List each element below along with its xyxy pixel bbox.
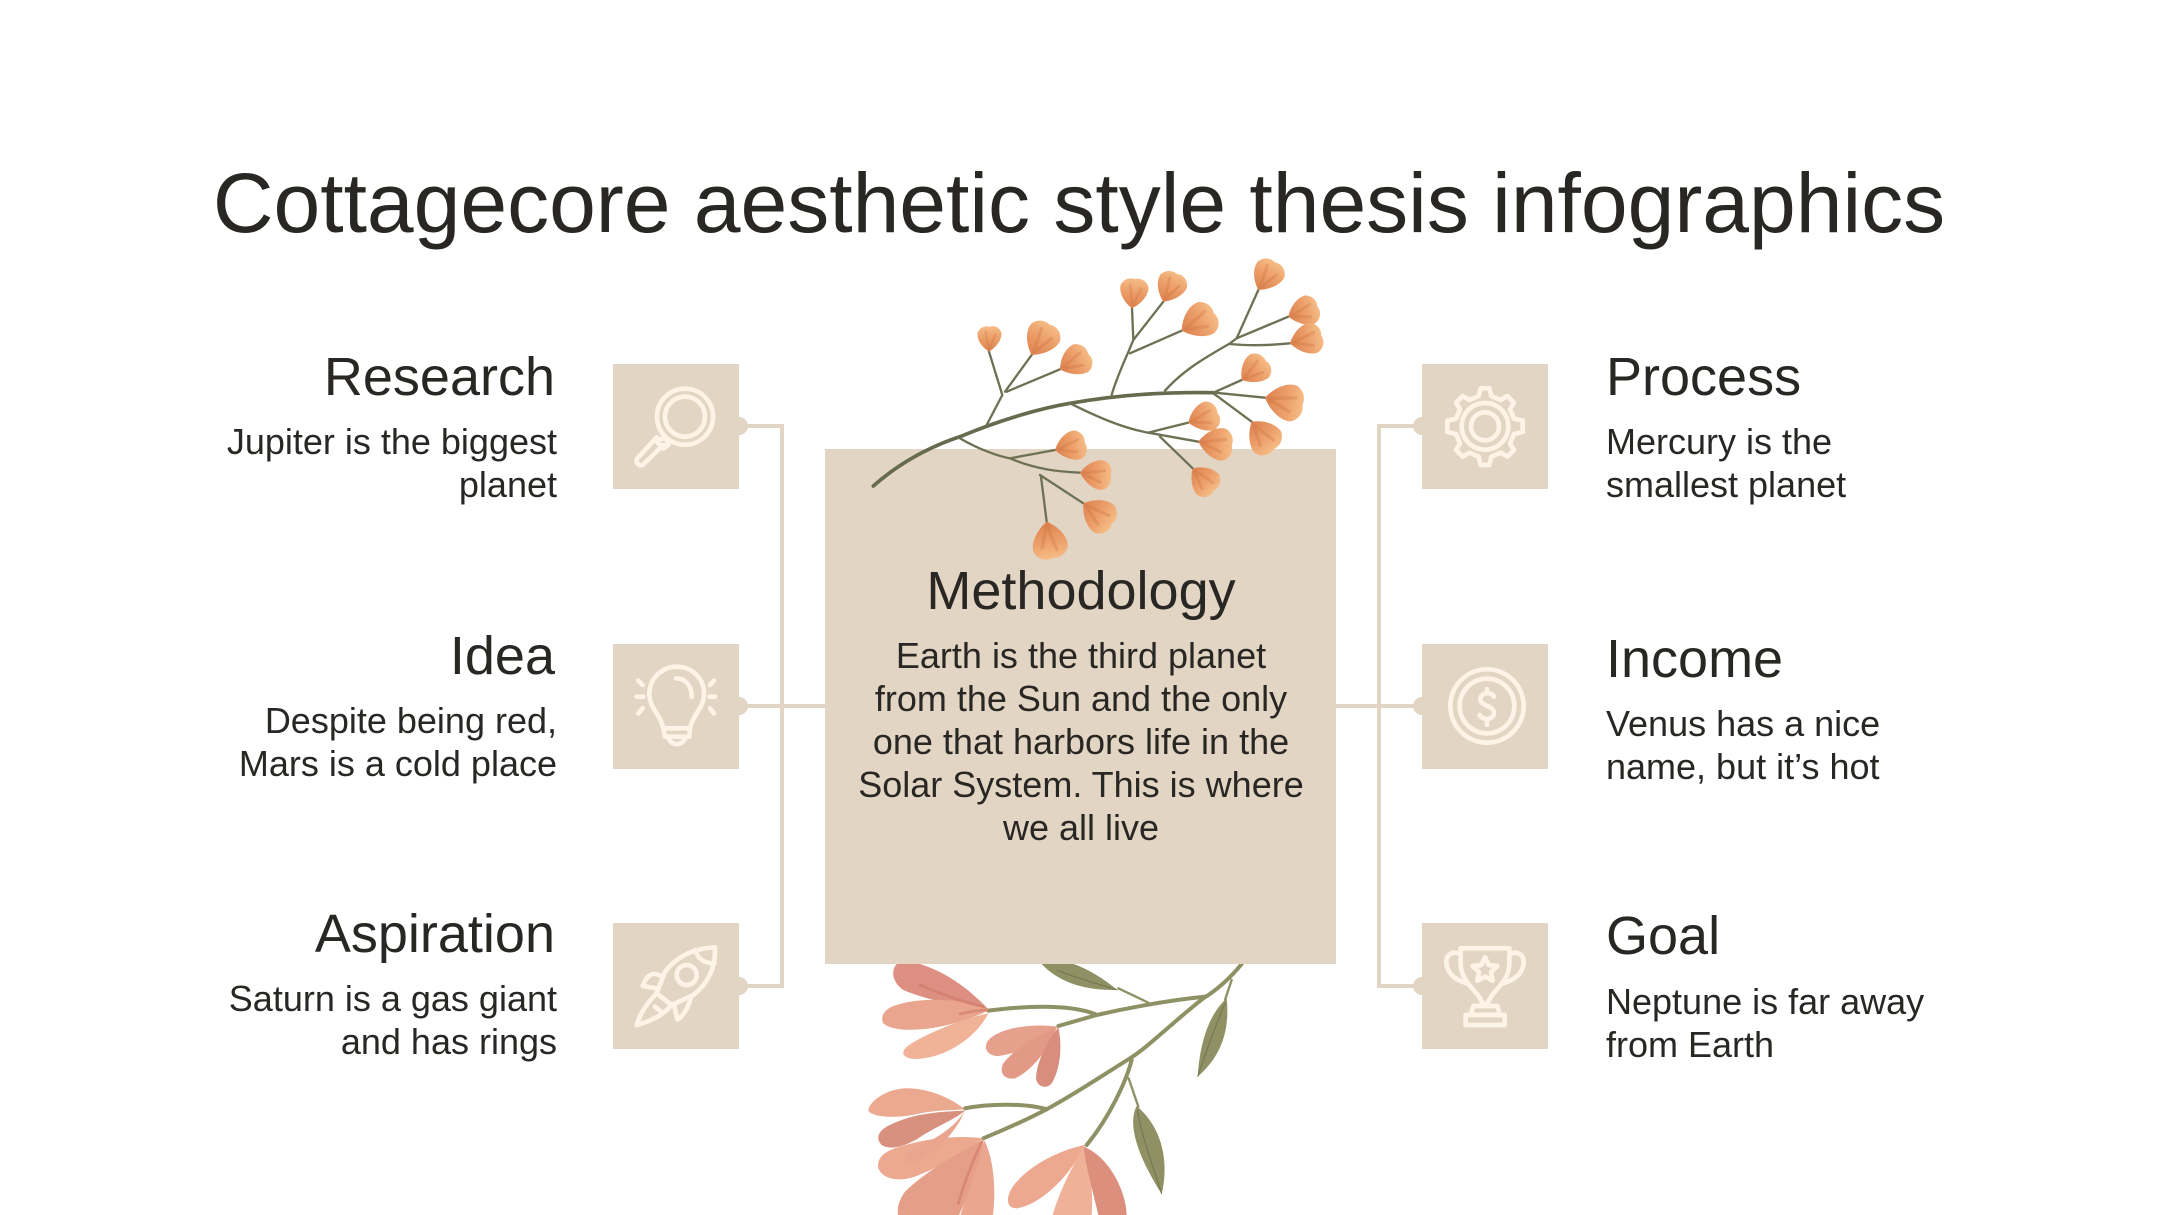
panel: Income <box>1422 629 1880 787</box>
text: Aspiration description: and has rings <box>341 1021 557 1062</box>
icon box: coin <box>1422 644 1548 769</box>
panel body text: one that harbors life in the <box>873 721 1289 762</box>
icon box: trophy <box>1422 923 1548 1049</box>
panel: Process <box>1422 347 1846 505</box>
illustration: pink flowers below the panel <box>868 964 1242 1215</box>
heading: Process: Process <box>1606 347 1801 407</box>
panel: Research <box>227 347 739 505</box>
title: Cottagecore aesthetic style thesis infographics <box>213 156 1945 250</box>
connector lines: left <box>730 417 827 995</box>
panel: Methodology <box>825 449 1336 964</box>
icon box: light bulb <box>613 644 739 769</box>
text: Goal description: from Earth <box>1606 1024 1774 1065</box>
text: Idea description: Mars is a cold place <box>239 743 557 784</box>
heading: Research: Research <box>324 347 555 407</box>
text: Income description: name, but it’s hot <box>1606 746 1880 787</box>
icon box: rocket <box>613 923 739 1049</box>
panel body text: we all live <box>1002 807 1159 848</box>
heading: Aspiration: Aspiration <box>315 904 555 964</box>
panel heading: Methodology <box>926 561 1236 621</box>
text: Goal description: Neptune is far away <box>1606 981 1924 1022</box>
panel body text: Solar System. This is where <box>858 764 1304 805</box>
text: Aspiration description: Saturn is a gas giant <box>229 978 557 1019</box>
icon box: magnifying glass <box>613 364 739 489</box>
text: Income description: Venus has a nice <box>1606 703 1880 744</box>
panel body text: from the Sun and the only <box>875 678 1287 719</box>
text: Process description: smallest planet <box>1606 464 1846 505</box>
heading: Income: Income <box>1606 629 1783 689</box>
text: Process description: Mercury is the <box>1606 421 1832 462</box>
text: Research description: planet <box>459 464 557 505</box>
panel body text: Earth is the third planet <box>896 635 1266 676</box>
panel: Idea <box>239 626 739 784</box>
panel: Goal <box>1422 906 1924 1065</box>
heading: Idea: Idea <box>450 626 556 686</box>
connector lines: right <box>1334 417 1431 995</box>
icon box: gear <box>1422 364 1548 489</box>
text: Research description: Jupiter is the biggest <box>227 421 557 462</box>
panel: Aspiration <box>229 904 739 1062</box>
text: Idea description: Despite being red, <box>265 700 557 741</box>
illustration: orange flower branch <box>873 254 1326 562</box>
heading: Goal: Goal <box>1606 906 1720 966</box>
